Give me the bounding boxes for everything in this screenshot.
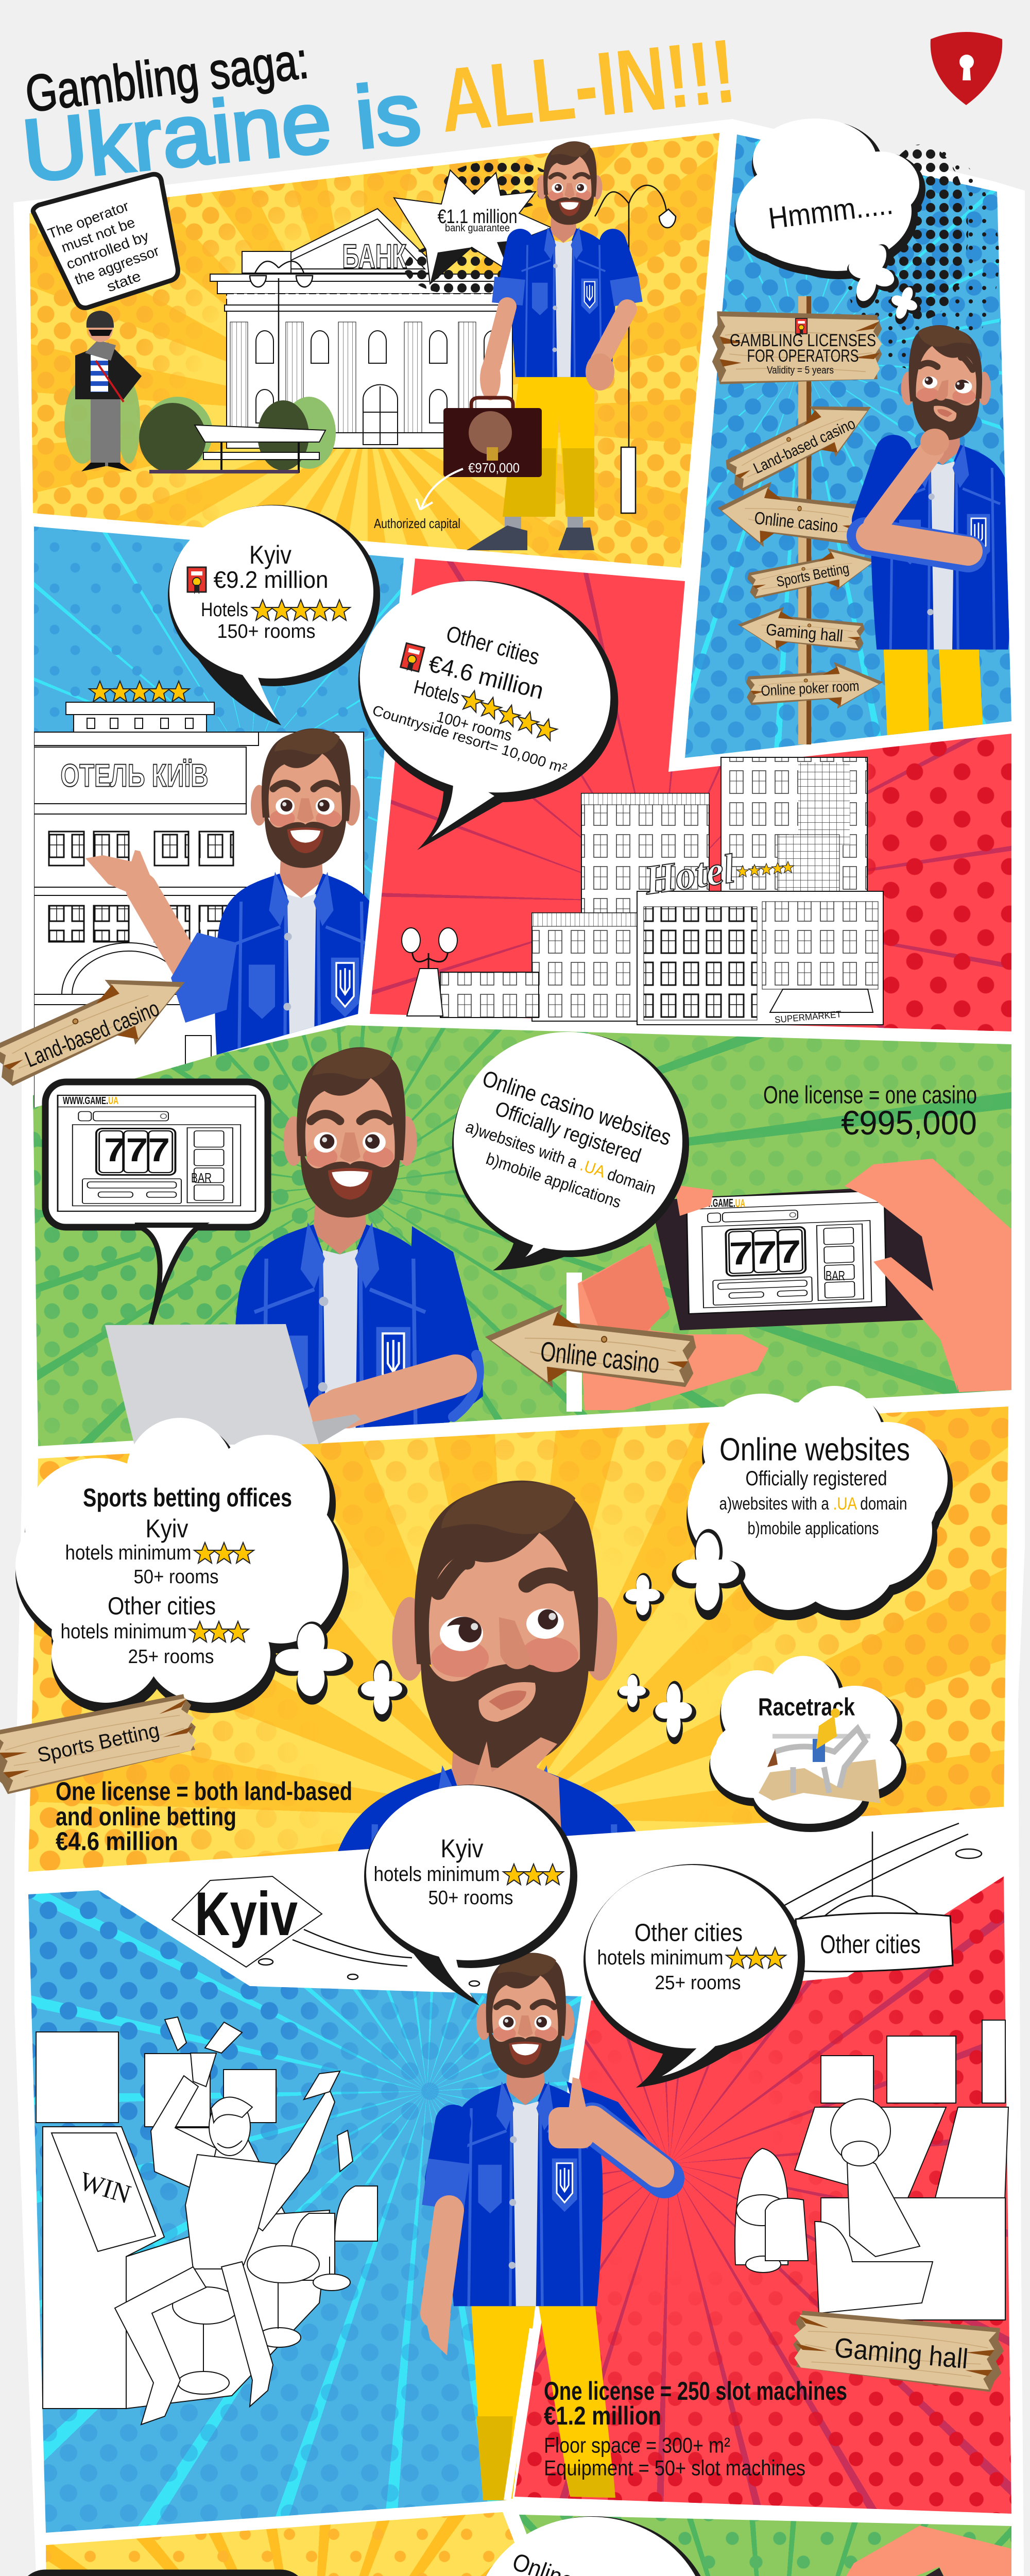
sign: Kyiv hanging: Kyiv	[195, 1879, 298, 1948]
sign: gaming hall: Gaming hall	[833, 2332, 969, 2375]
character: thumbs-up man	[423, 1953, 670, 2500]
phone with slot website and hands	[566, 1159, 1011, 1412]
halftone behind thought cloud	[845, 144, 999, 371]
speech bubble: other cities land-based casino: Countryside resort= 10,000 m²	[371, 702, 569, 776]
speech bubble: online poker room	[472, 2516, 715, 2576]
thought cloud: online websites: a)websites with a .UA domain	[719, 1494, 907, 1514]
note: operator must not be controlled by the aggressor state: the aggressor	[73, 243, 161, 288]
note: operator must not be controlled by the aggressor state	[33, 174, 178, 308]
WIN screen text: WIN	[76, 2166, 134, 2210]
panel: Kyiv land-based casino blue background	[34, 527, 404, 1108]
sign: gaming hall	[791, 2307, 1006, 2393]
thought puffs: right	[617, 1529, 745, 1744]
panel: online poker yellow background	[46, 2512, 515, 2576]
sign: gaming hall: Gaming hall	[765, 620, 844, 645]
licence info: sports betting	[56, 1777, 352, 1856]
thought cloud: Hmmm	[735, 118, 928, 329]
icon: street lamps	[250, 185, 676, 513]
speech bubble: poker website	[22, 2573, 304, 2576]
note: operator must not be controlled by the aggressor state: state	[105, 268, 143, 295]
licence info: gaming hall: One license = 250 slot machines	[544, 2377, 847, 2405]
sign: online casino	[714, 477, 865, 557]
street lantern	[402, 928, 457, 1016]
note: operator must not be controlled by the aggressor state: The operator	[46, 198, 131, 242]
speech bubble: online casino websites: b)mobile applications	[484, 1149, 624, 1212]
sign: gambling licenses: FOR OPERATORS	[747, 346, 859, 366]
hotel Kyiv building line art	[34, 702, 364, 1124]
speech bubble: other cities land-based casino	[333, 552, 643, 850]
licence info: online casino	[763, 1082, 977, 1142]
speech bubble: other cities land-based casino: Other cities	[443, 621, 542, 670]
icon: racehorse and jockey	[759, 1708, 880, 1803]
licence info: sports betting: €4.6 million	[56, 1827, 178, 1856]
phone with slot website and hands: 777	[729, 1234, 802, 1272]
speech bubble: other cities land-based casino: 100+ rooms	[435, 708, 514, 744]
speech bubble: other cities gaming hall: Other cities	[634, 1920, 743, 1946]
starburst: bank guarantee	[394, 170, 552, 284]
supermarket sign: SUPERMARKET	[774, 1009, 842, 1025]
character: standing man with briefcase	[467, 141, 628, 550]
city buildings line art	[402, 757, 883, 1025]
laptop	[105, 1324, 360, 1445]
icon: bushes and bench	[64, 381, 336, 473]
speech bubble: slot website: 777	[104, 1131, 170, 1168]
icon: brand shield logo	[931, 32, 1002, 105]
speech bubble: online casino websites	[452, 1032, 689, 1270]
hotel rooftop sign: Hotel	[641, 846, 738, 904]
character: thinking man by signpost	[865, 325, 1014, 762]
sign: gaming hall	[736, 603, 866, 659]
phone with slot website and hands: BAR	[826, 1268, 845, 1283]
bank illustration	[210, 209, 512, 448]
speech bubble: other cities gaming hall: 25+ rooms	[655, 1972, 741, 1994]
title line: Ukraine is: Ukraine is	[18, 63, 425, 200]
slot machines right line art	[735, 2020, 1008, 2320]
thought cloud: sports betting offices: hotels minimum	[65, 1541, 192, 1564]
character: big thinking man	[322, 1481, 666, 2263]
speech bubble: Kyiv gaming hall	[364, 1785, 577, 2006]
sign: sports betting	[745, 539, 881, 607]
title line: Gambling saga: Gambling saga:	[22, 31, 312, 123]
speech bubble: other cities gaming hall	[583, 1864, 805, 2088]
sign: gambling licenses: Validity = 5 years	[767, 365, 834, 376]
character: excited winner sketch	[115, 2017, 353, 2425]
panel: licence signpost blue background	[685, 134, 1011, 758]
sign: sports betting	[0, 1690, 201, 1796]
licence info: online casino: €995,000	[841, 1104, 977, 1142]
sign: other cities hanging: Other cities	[820, 1930, 921, 1959]
thought text: Hmmm.....	[766, 187, 895, 235]
speech bubble: slot website: BAR	[191, 1170, 212, 1185]
licence info: gaming hall: Equipment = 50+ slot machines	[544, 2455, 805, 2480]
sign: Kyiv hanging	[172, 1876, 322, 1967]
ceiling line art	[259, 1823, 982, 1986]
thief character	[75, 311, 142, 471]
bank sign: БАНК	[342, 237, 407, 275]
speech bubble: Kyiv land-based casino: 150+ rooms	[217, 621, 315, 642]
thought cloud: online websites	[688, 1386, 950, 1617]
speech bubble: Kyiv land-based casino: €9.2 million	[213, 566, 329, 593]
speech bubble: other cities land-based casino: Hotels	[411, 676, 462, 708]
phone with slot website and hands: WWW.GAME.UA	[692, 1196, 745, 1210]
sign: land-based casino on hotel panel: Land-based casino	[22, 996, 163, 1072]
sign: land-based casino on hotel panel	[0, 951, 200, 1100]
sign post	[798, 296, 811, 744]
speech bubble: online casino websites: a)websites with a .UA domain	[464, 1117, 658, 1198]
speech bubble: online casino websites: Officially registered	[492, 1097, 644, 1167]
speech bubble: other cities gaming hall: hotels minimum	[597, 1946, 723, 1969]
speech bubble: other cities land-based casino: €4.6 million	[426, 650, 546, 704]
panel: Kyiv gaming hall blue background	[28, 1890, 581, 2533]
arrow: to authorized capital	[416, 469, 463, 510]
thought cloud: racetrack: Racetrack	[758, 1694, 855, 1721]
speech bubble: Kyiv land-based casino: Kyiv	[249, 540, 291, 569]
rating stars on hotel	[89, 681, 190, 702]
capital amount: €970,000	[468, 460, 520, 476]
icon: briefcase authorized capital	[443, 398, 542, 477]
panel: online poker green background	[519, 2515, 1011, 2576]
panel: other cities red background	[370, 558, 1011, 1031]
thought cloud: sports betting offices: Kyiv	[145, 1514, 188, 1543]
sign: land-based casino: Land-based casino	[751, 415, 858, 477]
sign: sports betting: Sports Betting	[36, 1719, 161, 1767]
site address: WWW.GAME.UA	[63, 1095, 118, 1107]
slot machines left line art	[36, 2032, 377, 2409]
title	[18, 21, 740, 200]
speech bubble: Kyiv land-based casino	[168, 505, 380, 725]
title line: ALL-IN: ALL-IN!!!	[435, 21, 740, 151]
speech bubble: Kyiv gaming hall: 50+ rooms	[428, 1887, 513, 1909]
guarantee amount: €1.1 million	[438, 206, 517, 228]
thought cloud: sports betting offices: Other cities	[108, 1593, 216, 1620]
character: man at laptop online casino	[234, 1047, 483, 1528]
character: man presenting hotel	[85, 728, 388, 1122]
licence info: gaming hall: Floor space = 300+ m²	[544, 2433, 730, 2458]
sign: online poker room	[745, 659, 884, 714]
panel: other cities gaming hall red background	[514, 1876, 1011, 2514]
licence info: gaming hall: €1.2 million	[544, 2401, 661, 2430]
label: authorized capital: Authorized capital	[374, 516, 460, 531]
speech bubble: slot website	[45, 1082, 268, 1324]
sign: online casino large: Online casino	[539, 1336, 661, 1379]
licence info: sports betting: and online betting	[56, 1802, 236, 1831]
thought cloud: sports betting offices	[15, 1418, 346, 1710]
licence info: gaming hall	[544, 2377, 847, 2480]
thought cloud: online websites: b)mobile applications	[748, 1519, 879, 1538]
sign: online casino: Online casino	[753, 509, 839, 536]
speech bubble: Kyiv gaming hall: hotels minimum	[374, 1863, 500, 1886]
note: operator must not be controlled by the aggressor state: controlled by	[64, 228, 151, 273]
sign: other cities hanging	[796, 1913, 953, 1972]
thought cloud: online websites: Officially registered	[746, 1467, 887, 1490]
thought puffs: left	[271, 1621, 407, 1722]
guarantee caption: bank guarantee	[445, 223, 510, 234]
thought cloud: online websites: Online websites	[719, 1432, 910, 1467]
thought cloud: racetrack	[710, 1656, 903, 1829]
speech bubble: Kyiv gaming hall: Kyiv	[441, 1834, 483, 1863]
icon: halftone burst shadow	[404, 161, 556, 296]
thought cloud: sports betting offices: 25+ rooms	[128, 1646, 214, 1668]
thought cloud: sports betting offices: hotels minimum	[61, 1620, 186, 1643]
speech bubble: Kyiv land-based casino: Hotels	[201, 599, 248, 621]
sign: online poker room: Online poker room	[761, 678, 860, 699]
sign: gambling licenses: GAMBLING LICENSES	[730, 331, 876, 350]
hotel sign: ОТЕЛЬ КИЇВ	[61, 758, 208, 793]
panel: bank guarantee yellow background	[29, 133, 719, 568]
note: operator must not be controlled by the aggressor state: must not be	[59, 214, 137, 256]
panel: online casino green background	[33, 1025, 1011, 1446]
panel: sports betting yellow background	[28, 1406, 1008, 1872]
phone with poker website and hands	[624, 2526, 1011, 2576]
sign: gambling licenses	[712, 311, 882, 384]
licence info: sports betting: One license = both land-based	[56, 1777, 352, 1806]
thought cloud: sports betting offices: 50+ rooms	[134, 1566, 218, 1588]
sign: online casino large	[480, 1297, 699, 1402]
sign: sports betting: Sports Betting	[775, 560, 850, 590]
icon: flying banknotes	[165, 2017, 186, 2050]
thought cloud: sports betting offices: Sports betting offices	[83, 1483, 292, 1512]
speech bubble: online casino websites: Online casino websites	[479, 1066, 674, 1150]
sign: land-based casino	[718, 382, 884, 502]
